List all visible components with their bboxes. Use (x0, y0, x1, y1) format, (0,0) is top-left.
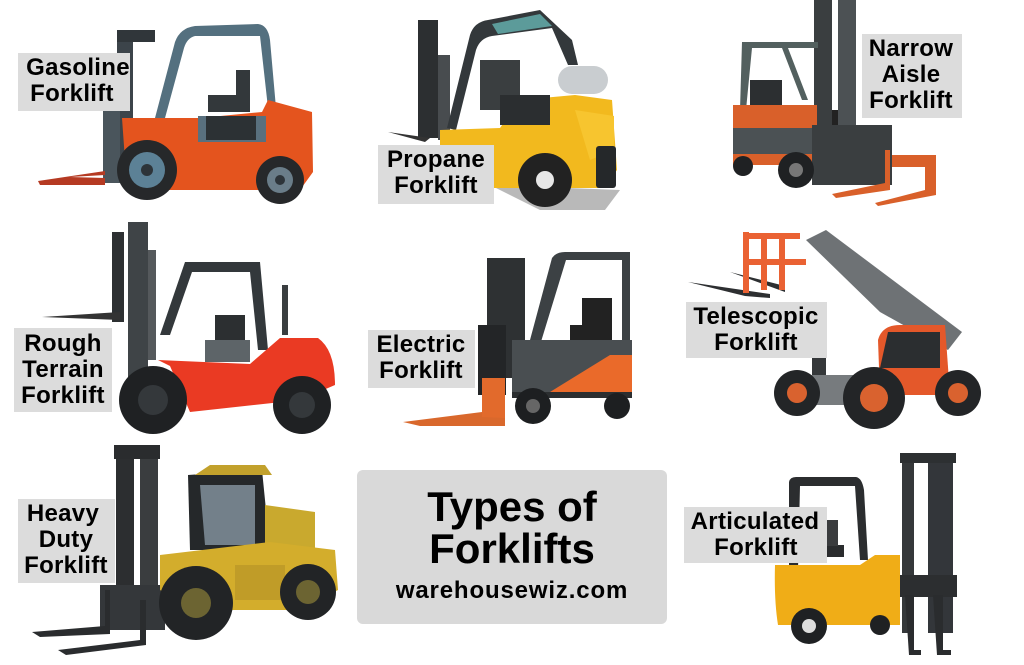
label: Narrow Aisle Forklift (862, 34, 962, 118)
narrow aisle forklift illustration (733, 0, 936, 206)
telescopic forklift illustration (688, 230, 981, 429)
label: Telescopic Forklift: Forklift (714, 329, 798, 356)
label: Electric Forklift: Electric (376, 331, 466, 358)
title: Forklifts (429, 525, 595, 572)
label: Propane Forklift (378, 145, 494, 204)
label: Narrow Aisle Forklift: Narrow (869, 35, 953, 62)
label: Rough Terrain Forklift: Rough (24, 330, 102, 357)
label: Propane Forklift: Propane (387, 146, 485, 173)
website: warehousewiz.com (395, 577, 628, 604)
label: Gasoline Forklift: Gasoline (26, 54, 130, 81)
propane forklift illustration (388, 10, 620, 210)
title panel (357, 470, 667, 624)
label: Telescopic Forklift (686, 302, 827, 358)
title: Types of (427, 483, 597, 530)
heavy duty forklift illustration (32, 445, 338, 655)
electric forklift illustration (403, 252, 632, 426)
label: Propane Forklift: Forklift (394, 172, 478, 199)
label: Rough Terrain Forklift: Terrain (22, 356, 104, 383)
label: Gasoline Forklift (18, 53, 130, 111)
gasoline forklift illustration (38, 24, 313, 204)
articulated forklift illustration (775, 453, 957, 655)
label: Heavy Duty Forklift: Forklift (24, 552, 108, 579)
label: Articulated Forklift (684, 507, 827, 563)
label: Electric Forklift (368, 330, 475, 388)
label: Narrow Aisle Forklift: Forklift (869, 87, 953, 114)
label: Narrow Aisle Forklift: Aisle (882, 61, 940, 88)
label: Heavy Duty Forklift: Duty (39, 526, 94, 553)
label: Articulated Forklift: Forklift (714, 534, 798, 561)
label: Rough Terrain Forklift (14, 328, 112, 412)
label: Rough Terrain Forklift: Forklift (21, 382, 105, 409)
label: Heavy Duty Forklift: Heavy (27, 500, 99, 527)
label: Telescopic Forklift: Telescopic (693, 303, 819, 330)
label: Electric Forklift: Forklift (379, 357, 463, 384)
label: Articulated Forklift: Articulated (691, 508, 819, 535)
label: Heavy Duty Forklift (18, 499, 115, 583)
rough terrain forklift illustration (42, 222, 335, 434)
label: Gasoline Forklift: Forklift (30, 80, 114, 107)
